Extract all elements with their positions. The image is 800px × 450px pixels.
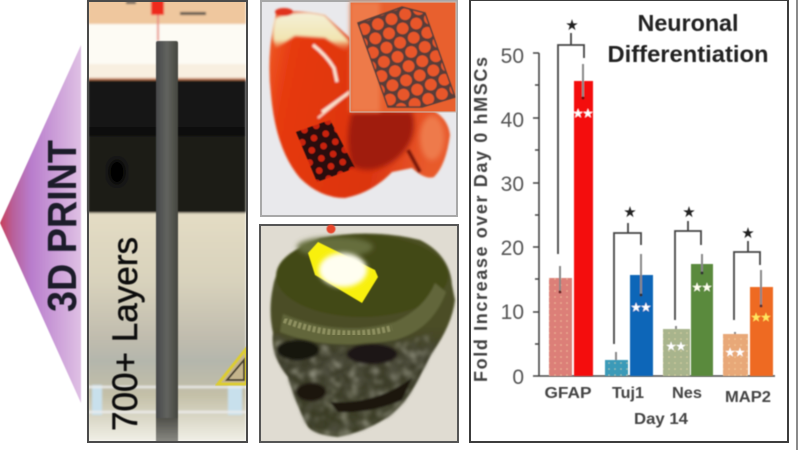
significance stars: ★ [623, 204, 637, 221]
y axis: 50 [501, 45, 524, 68]
skull body [270, 233, 455, 437]
y axis: 0 [512, 366, 524, 389]
LED yellow patch [308, 242, 378, 303]
panel: skull with glowing LED [260, 224, 458, 442]
bars: Tuj1: ★★ [631, 302, 651, 314]
x axis labels: MAP2 [725, 389, 771, 406]
label: 700+ Layers: 700+ Layers [106, 237, 145, 431]
y axis: 30 [501, 173, 524, 196]
significance stars: ★ [682, 204, 696, 221]
heart tissue [269, 8, 450, 198]
printed mesh on heart [296, 120, 355, 182]
bars: MAP2: ★★ [725, 347, 745, 359]
bars: Nes [663, 254, 713, 376]
y axis: 10 [501, 301, 524, 324]
arrow: purple 3D print triangle [0, 45, 85, 403]
bars: MAP2: ★★ [751, 312, 771, 324]
significance stars [565, 17, 755, 242]
label: 3D PRINT: 3D PRINT [39, 140, 85, 312]
red wire [326, 224, 336, 234]
mesh band on skull [284, 320, 392, 333]
panel: heart with printed mesh [261, 1, 457, 216]
significance stars: ★ [741, 225, 755, 242]
y axis [501, 45, 775, 389]
bars: Nes: ★★ [692, 282, 712, 294]
x axis labels: Tuj1 [612, 385, 644, 402]
y axis title: Fold Increase over Day 0 hMSCs [471, 57, 491, 382]
chart title: Differentiation [608, 41, 768, 67]
y axis: 40 [501, 109, 524, 132]
chart title: Neuronal [638, 10, 738, 36]
significance brackets [558, 33, 760, 344]
x axis labels: Nes [672, 385, 702, 402]
panel: printed column photo [87, 0, 247, 442]
bars: MAP2 [723, 270, 773, 376]
bars: Nes: ★★ [666, 341, 686, 353]
x axis labels: GFAP [544, 385, 592, 402]
bars: Tuj1 [605, 254, 653, 376]
significance stars: ★ [565, 17, 579, 34]
printed rod [156, 41, 178, 442]
bars: GFAP: ★★ [573, 108, 593, 120]
x axis labels: Day 14 [634, 411, 688, 428]
chart title [608, 10, 768, 67]
bars: GFAP [549, 64, 593, 376]
right edge rule [796, 0, 798, 450]
panel: neuronal differentiation chart [470, 0, 788, 442]
x axis labels [544, 385, 771, 428]
icon: yellow hazard triangle [218, 349, 246, 384]
y axis: 20 [501, 237, 524, 260]
inset: magnified mesh [350, 2, 456, 112]
